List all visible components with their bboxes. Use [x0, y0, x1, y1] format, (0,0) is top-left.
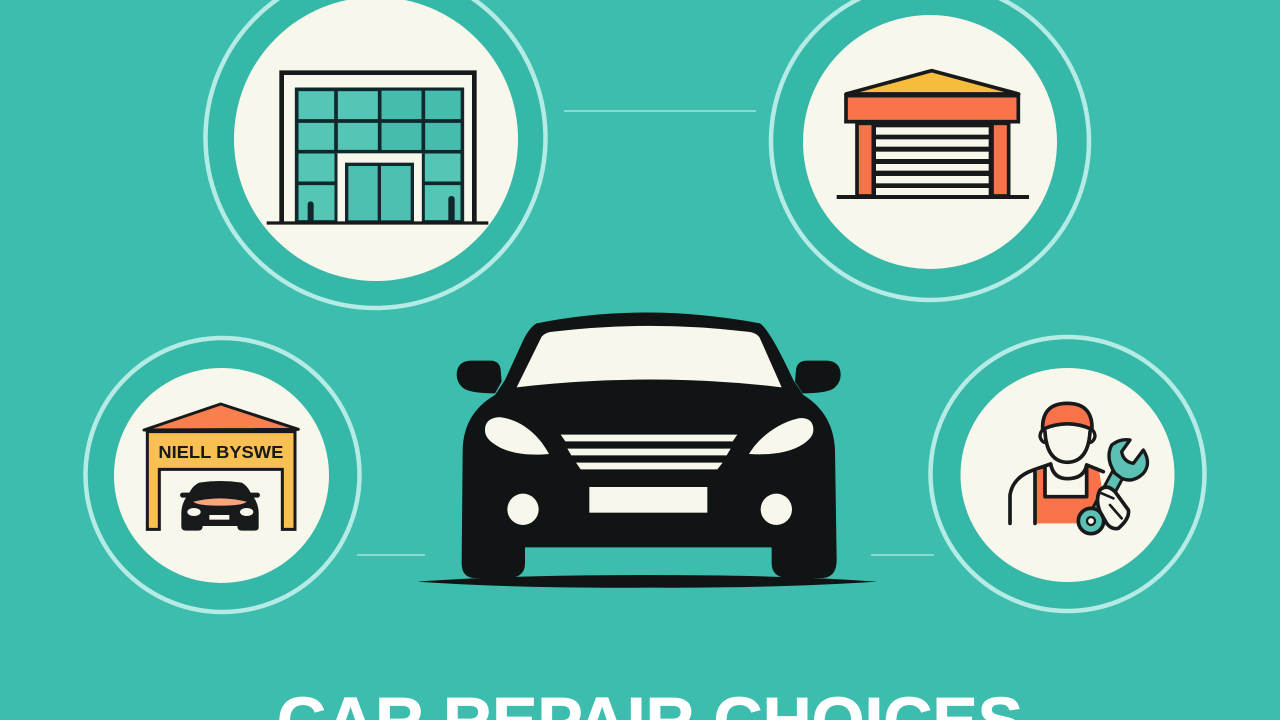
side mirror left	[457, 361, 502, 393]
icon: roller-door garage	[837, 71, 1029, 197]
icon: mechanic with wrench	[1010, 403, 1147, 534]
icon: service centre with car	[144, 404, 298, 531]
panel: independent garage option	[771, 0, 1089, 300]
headlight right	[749, 418, 813, 454]
icon: small car	[180, 481, 260, 531]
side mirror right	[795, 361, 841, 393]
licence plate	[589, 487, 707, 513]
fog lights	[507, 494, 792, 525]
headlight left	[485, 417, 549, 455]
ground shadow	[417, 575, 877, 588]
windshield	[517, 326, 782, 387]
panel: mechanic option	[930, 337, 1204, 611]
panel: dealership option	[206, 0, 546, 308]
illustration: central black car	[417, 312, 877, 588]
car body	[462, 312, 837, 578]
panel: branded service centre option	[86, 338, 360, 612]
sign text: NIELL BYSWE	[158, 442, 283, 462]
icon: glass-front dealership building	[267, 73, 488, 223]
grille	[561, 435, 737, 469]
